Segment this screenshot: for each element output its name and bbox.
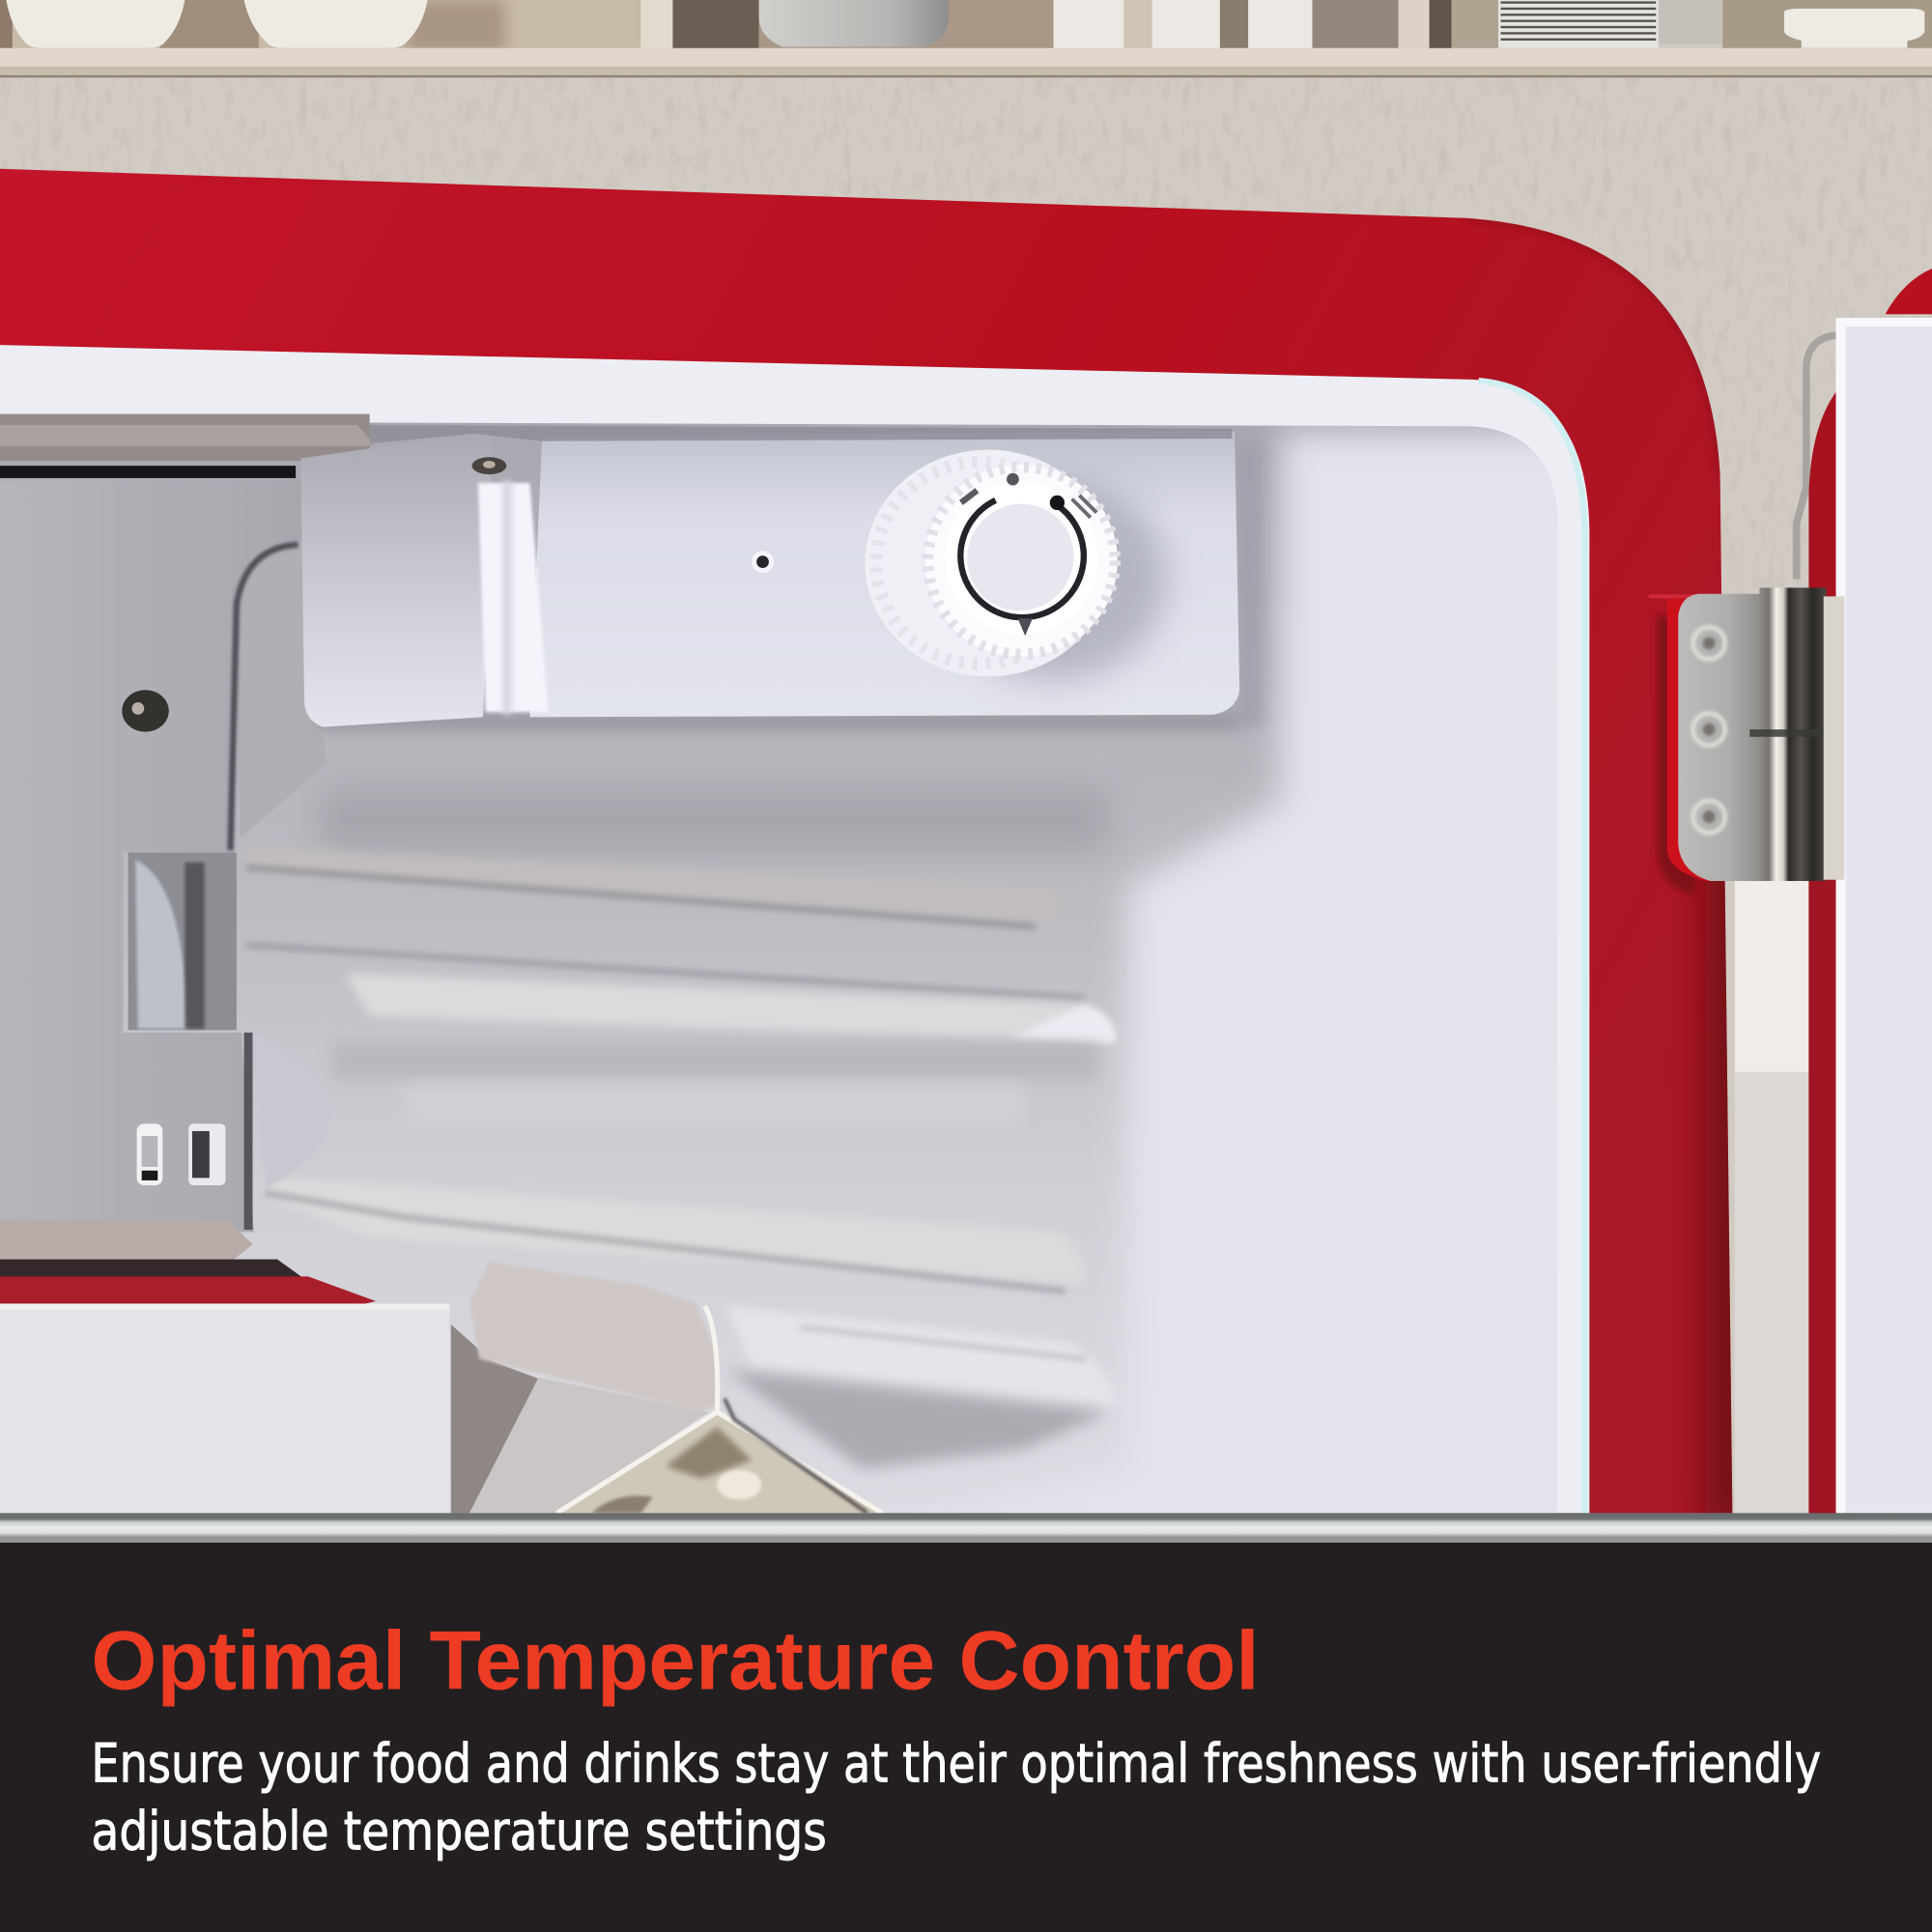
- shelf board: [0, 48, 1932, 67]
- chrome divider bar: [0, 1513, 1932, 1543]
- white tubes: [1054, 0, 1312, 49]
- knob face: [945, 482, 1097, 635]
- ridge two: [246, 945, 1084, 998]
- knob body: [865, 450, 1112, 676]
- knob teeth: [925, 465, 1118, 657]
- left metal bracket panel: [0, 480, 330, 1233]
- clip lower face: [469, 1378, 708, 1513]
- ridge three: [265, 1177, 1086, 1284]
- clip white edge: [557, 1306, 882, 1513]
- temperature dial ring: [958, 497, 1084, 618]
- vase centre: [244, 0, 428, 48]
- cutout window: [128, 853, 237, 1030]
- housing screw: [472, 457, 506, 474]
- white pot: [1784, 9, 1924, 48]
- bracket plate: [0, 480, 301, 1233]
- chrome triangle: [554, 1412, 882, 1513]
- housing ribs: [478, 483, 549, 712]
- housing hole: [752, 551, 774, 573]
- stacked plates: [1498, 0, 1722, 48]
- door hinge: [1649, 587, 1844, 894]
- hinge screws: [1693, 627, 1725, 833]
- door bin clip: [451, 1262, 882, 1513]
- control housing: [300, 425, 1239, 729]
- housing left section: [300, 434, 493, 727]
- right door: [1735, 269, 1932, 1513]
- bracket dark seam: [231, 545, 298, 850]
- clip shadow wedge: [451, 1324, 542, 1513]
- fridge body red frame: [0, 169, 1732, 1513]
- door red edge: [1808, 384, 1842, 1513]
- beige door strip, red edge and white bin: [0, 1220, 450, 1513]
- bracket slots: [137, 1123, 225, 1185]
- description: [91, 1732, 1821, 1862]
- bracket right edge: [244, 1033, 252, 1230]
- upper door rail strip: [0, 414, 376, 478]
- knob body ribs: [876, 462, 1083, 665]
- liner ridges: [246, 848, 1116, 1468]
- clip dark edge: [724, 1399, 867, 1513]
- hinge red bracket shadow: [1658, 616, 1694, 894]
- white door gasket: [0, 345, 1589, 1513]
- housing top shadow: [370, 425, 1233, 443]
- hinge barrel: [1759, 587, 1826, 881]
- hinge plate: [1678, 594, 1765, 881]
- grey cup: [759, 0, 949, 46]
- lower bulge of liner: [252, 1033, 330, 1189]
- heading: Optimal Temperature Control: [91, 1614, 1260, 1708]
- bracket screw: [122, 690, 169, 732]
- hinge leaf: [1824, 596, 1844, 880]
- door red top peek: [1886, 269, 1932, 314]
- vase left: [6, 0, 185, 48]
- shadow right of control box: [1237, 443, 1264, 727]
- open shelf with dishes: [0, 0, 1932, 77]
- side wall light area: [1048, 426, 1557, 1513]
- door wire: [1797, 335, 1836, 579]
- bracket right wing: [234, 542, 327, 838]
- gasket cyan edge: [1479, 381, 1584, 1513]
- ridge four: [727, 1306, 1116, 1407]
- cream strip below hinge: [1735, 875, 1808, 1513]
- description: adjustable temperature settings: [91, 1801, 827, 1862]
- ridge one: [254, 852, 846, 887]
- hinge red bracket: [1667, 599, 1749, 881]
- shadow below control box: [321, 788, 1109, 853]
- dial markers: [961, 473, 1096, 636]
- wall background: [0, 0, 1932, 1528]
- temperature control knob: [865, 450, 1167, 680]
- fridge interior liner: [0, 419, 1602, 1552]
- red frame right shadow: [1466, 218, 1756, 1528]
- knob shadow: [940, 478, 1167, 680]
- caption panel: [0, 1543, 1932, 1932]
- clip upper face: [469, 1262, 717, 1412]
